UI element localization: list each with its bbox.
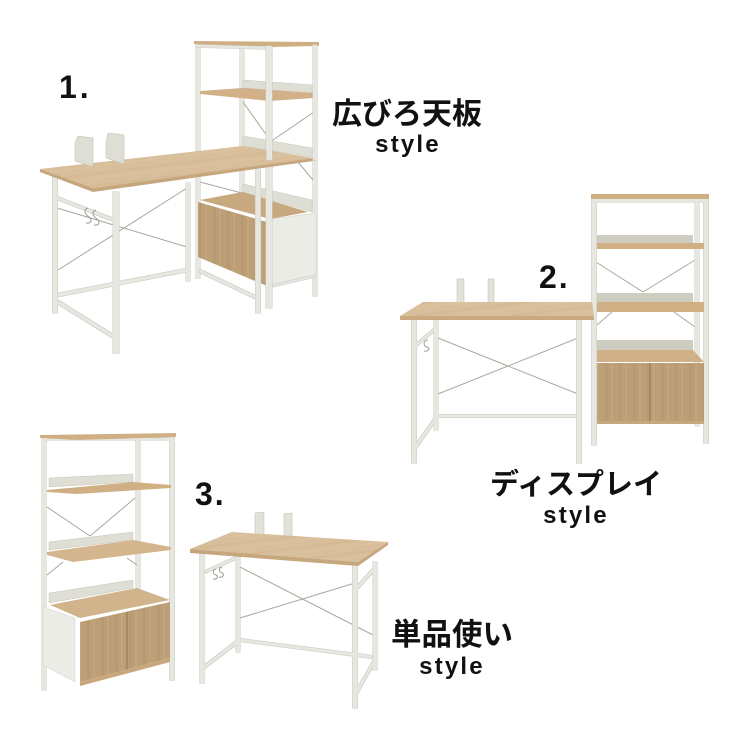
heading: display style: style	[543, 502, 609, 529]
shelf 1 top bar	[196, 46, 315, 298]
shelf 3 boards	[47, 482, 171, 562]
furniture 1: desk joined to shelf, wide-top style	[40, 41, 319, 353]
shelf 1 back frame	[198, 43, 315, 296]
desk 2 top	[400, 302, 594, 320]
shelf 2 boards	[597, 243, 704, 312]
cabinet 1 top	[200, 192, 308, 219]
heading: wide top style	[332, 98, 482, 158]
cabinet 2 top	[597, 350, 704, 362]
furniture 3: separate desk	[190, 512, 388, 708]
heading: display style	[490, 467, 662, 529]
cabinet 3 doors	[80, 602, 170, 686]
heading: standalone use style	[391, 618, 513, 680]
cabinet 1 doors	[198, 202, 267, 286]
heading: wide top style: 広びろ天板	[332, 98, 482, 131]
heading: standalone use style: style	[419, 653, 485, 680]
desk 3 bookends	[255, 512, 292, 539]
number 2: 2.	[539, 259, 570, 295]
desk 2 wires	[438, 338, 578, 394]
desk 2 bookends	[457, 279, 494, 305]
shelf 2 frame	[594, 199, 706, 445]
shelf 3 front post	[73, 440, 79, 708]
shelf 1 front post over desk	[269, 45, 315, 160]
cabinet 3 top	[50, 588, 170, 618]
desk 1 bookends	[75, 133, 124, 167]
heading: display style: ディスプレイ	[490, 467, 662, 501]
cabinet 1 white side panel	[270, 213, 316, 286]
desk 1 legs and bars	[55, 46, 269, 353]
number 1: 1.	[59, 69, 92, 105]
desk 1 wires	[57, 188, 187, 270]
shelf 2 top board	[591, 194, 709, 199]
heading: standalone use style: 単品使い	[391, 618, 513, 652]
desk 3 wires	[240, 567, 373, 635]
shelf 2 wires	[596, 260, 695, 327]
shelf 1 upper board	[200, 88, 313, 101]
cabinet 2 doors	[597, 363, 704, 424]
desk 3 top	[190, 532, 388, 566]
furniture 3: separate shelf	[40, 433, 176, 708]
shelf 1 back panels	[243, 80, 312, 212]
icon: S hooks 1	[85, 208, 99, 225]
desk 3 legs and bars	[202, 553, 375, 708]
shelf 3 back panels	[49, 474, 133, 603]
shelf 1 top board	[194, 41, 319, 47]
desk 2 legs and bars	[414, 320, 579, 463]
icon: S hooks 3	[213, 567, 223, 579]
desk 1 top	[40, 146, 313, 192]
heading: wide top style: style	[375, 131, 441, 158]
number 3: 3.	[195, 476, 226, 512]
shelf 1 cross wires	[200, 102, 314, 197]
cabinet 3 white side panel	[43, 607, 75, 682]
shelf 3 top board	[40, 433, 176, 440]
furniture 2: desk beside shelf, display style	[400, 194, 709, 463]
shelf 3 wires	[47, 498, 137, 575]
shelf 3 back and side frame	[42, 437, 174, 690]
icon: S hooks 2	[424, 340, 429, 351]
shelf 2 back panels	[597, 235, 693, 350]
